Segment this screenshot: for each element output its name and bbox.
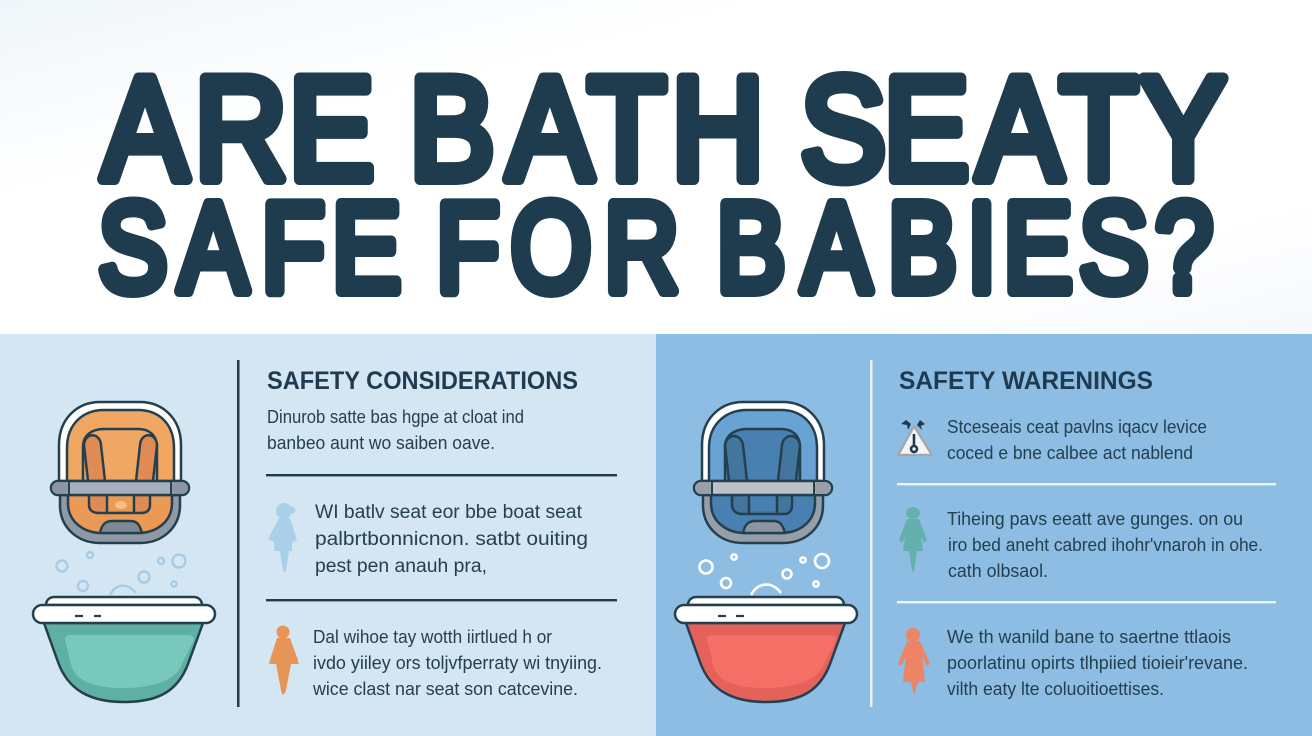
- title: [98, 48, 1226, 318]
- illustration: red bathtub: [675, 597, 857, 702]
- text block: item 2: [315, 502, 588, 577]
- text block: warning 2: iro bed aneht cabred ihohr'vnaroh in ohe.: [948, 535, 1263, 555]
- text block: warning 3: poorlatinu opirts tlhpiied tioieir'revane.: [947, 653, 1248, 673]
- panel: safety considerations: [0, 334, 656, 736]
- icon: coral figure: [898, 628, 930, 695]
- text block: warning 3: [947, 627, 1248, 699]
- text block: item 1: Dinurob satte bas hgpe at cloat ind: [267, 407, 524, 427]
- text block: item 1: banbeo aunt wo saiben oave.: [267, 433, 495, 453]
- header background: [0, 0, 1312, 334]
- title: ARE BATH SEATY: [102, 48, 1226, 211]
- vertical divider: [870, 360, 872, 707]
- text block: item 2: pest pen anauh pra,: [315, 556, 487, 577]
- text block: warning 3: vilth eaty lte coluoitioettises.: [947, 679, 1164, 699]
- text block: item 2: palbrtbonnicnon. satbt ouiting: [315, 529, 588, 550]
- heading: safety warnings: SAFETY WARENINGS: [899, 367, 1153, 395]
- text block: item 2: WI batlv seat eor bbe boat seat: [315, 502, 583, 523]
- icon: orange adult: [269, 626, 299, 694]
- text block: warning 1: [947, 417, 1207, 463]
- illustration: green bathtub: [33, 597, 215, 702]
- illustration: blue bath seat: [694, 402, 832, 543]
- panel: safety warnings: [656, 334, 1312, 736]
- text block: item 3: ivdo yiiley ors toljvfperraty wi tnyiing.: [313, 653, 602, 673]
- illustration: white bubbles: [700, 554, 829, 595]
- icon: warning triangle: [898, 420, 932, 455]
- text block: warning 1: coced e bne calbee act nablend: [947, 443, 1193, 463]
- text block: warning 2: Tiheing pavs eeatt ave gunges. on ou: [947, 509, 1243, 529]
- icon: green figure: [899, 507, 927, 572]
- illustration: orange bath seat: [51, 402, 189, 543]
- text block: warning 2: [947, 509, 1263, 581]
- illustration: bubbles: [56, 552, 186, 595]
- text block: warning 2: cath olbsaol.: [948, 561, 1048, 581]
- heading: safety considerations: SAFETY CONSIDERATIONS: [267, 367, 578, 395]
- icon: blue child: [268, 503, 297, 572]
- text block: item 3: [312, 627, 602, 699]
- text block: item 3: wice clast nar seat son catcevine.: [312, 679, 578, 699]
- text block: item 1: [267, 407, 524, 453]
- title: SAFE FOR BABIES?: [98, 178, 1213, 318]
- vertical divider: [237, 360, 240, 707]
- text block: warning 3: We th wanild bane to saertne ttlaois: [947, 627, 1231, 647]
- text block: warning 1: Stceseais ceat pavlns iqacv levice: [947, 417, 1207, 437]
- text block: item 3: Dal wihoe tay wotth iirtlued h or: [313, 627, 552, 647]
